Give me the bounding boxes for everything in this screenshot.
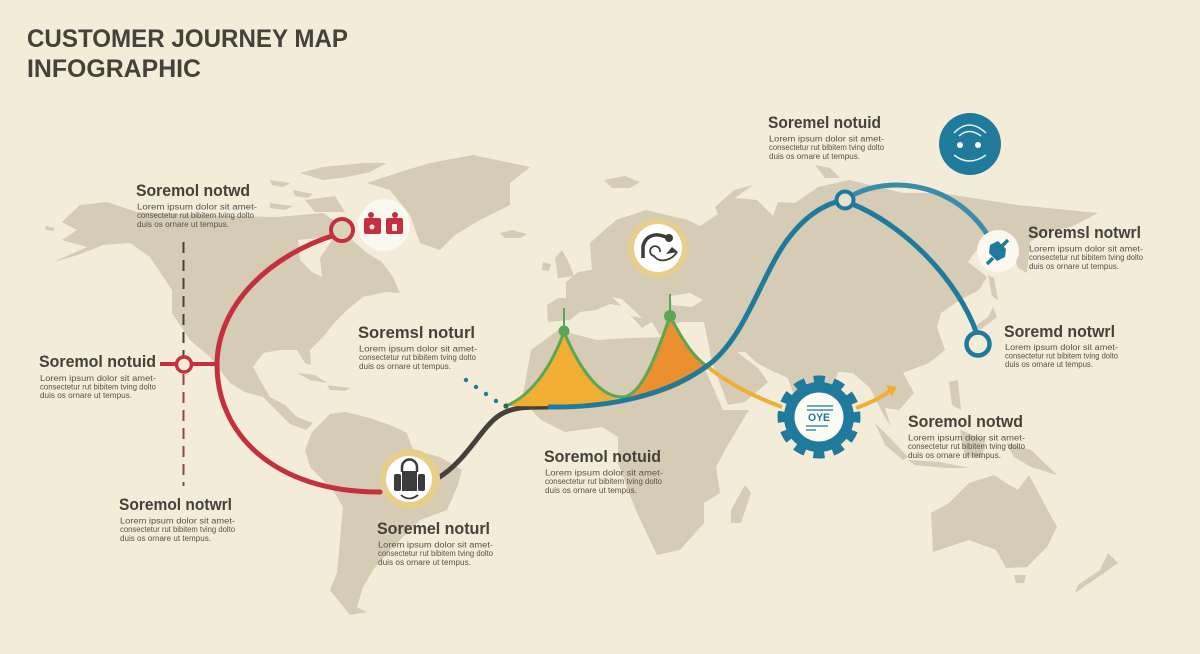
icon: gear (782, 380, 856, 454)
callout: top right: Lorem ipsum dolor sit amet- (769, 134, 884, 144)
top ring node (836, 192, 854, 208)
callout: top left (136, 182, 257, 229)
callout: japan (1004, 323, 1119, 369)
title: INFOGRAPHIC (27, 55, 201, 83)
callout: top right (768, 114, 885, 161)
callout: southeast asia: Soremol notwd (908, 413, 1023, 431)
callout: far east: Soremsl notwrl (1028, 224, 1141, 242)
callout: bottom left: consectetur rut bibitem tving dolto (120, 525, 236, 534)
callout: top left: consectetur rut bibitem tving dolto (137, 211, 255, 220)
callout: far east (1028, 224, 1144, 271)
callout: left: Lorem ipsum dolor sit amet- (40, 374, 156, 383)
callout: far east: consectetur rut bibitem tving dolto (1029, 253, 1144, 262)
end ring node (966, 332, 990, 356)
callout: africa (544, 448, 663, 495)
callout: southeast asia: consectetur rut bibitem tving dolto (908, 442, 1026, 451)
title: CUSTOMER JOURNEY MAP (27, 25, 348, 53)
blue descending arc (850, 203, 977, 334)
red connector with node (160, 357, 217, 372)
callout: south america: Soremel noturl (377, 520, 490, 538)
red ring node (331, 219, 353, 241)
red journey path (217, 235, 380, 492)
icon: gear: OYE (808, 412, 830, 424)
callout: top right: consectetur rut bibitem tving dolto (769, 143, 885, 152)
icon: swirl (628, 218, 688, 278)
icon: red cases (358, 199, 410, 251)
callout: atlantic: Lorem ipsum dolor sit amet- (359, 344, 477, 354)
callout: top right: duis os ornare ut tempus. (769, 152, 860, 161)
icon: plug (977, 230, 1019, 272)
callout: bottom left: Lorem ipsum dolor sit amet- (120, 516, 235, 526)
callout: bottom left (119, 496, 236, 543)
blue journey path (548, 200, 845, 407)
callout: southeast asia: duis os ornare ut tempus. (908, 451, 1001, 460)
green peaks line (506, 294, 708, 406)
callout: africa: Lorem ipsum dolor sit amet- (545, 468, 663, 478)
callout: top left: Soremol notwd (136, 182, 250, 200)
callout: africa: duis os ornare ut tempus. (545, 486, 637, 495)
callout: africa: Soremol notuid (544, 448, 661, 466)
world map (45, 155, 1118, 615)
orange area chart (506, 318, 708, 406)
callout: south america: duis os ornare ut tempus. (378, 558, 471, 567)
icon: bag (380, 449, 440, 509)
callout: left: duis os ornare ut tempus. (40, 391, 132, 400)
callout: japan: Lorem ipsum dolor sit amet- (1005, 343, 1118, 352)
icon: smiley (939, 113, 1001, 175)
light blue arc (845, 185, 987, 234)
callout: south america: Lorem ipsum dolor sit amet- (378, 540, 493, 550)
callout: left (39, 353, 157, 400)
callout: japan: consectetur rut bibitem tving dolto (1005, 352, 1119, 360)
callout: far east: Lorem ipsum dolor sit amet- (1029, 244, 1143, 254)
callout: atlantic: duis os ornare ut tempus. (359, 362, 451, 371)
dashed vertical guide (182, 242, 184, 486)
dark journey path (438, 407, 548, 478)
callout: left: consectetur rut bibitem tving dolto (40, 382, 157, 392)
yellow connector and arrow (708, 367, 896, 408)
callout: japan: Soremd notwrl (1004, 323, 1115, 341)
inland seas (298, 236, 703, 318)
callout: japan: duis os ornare ut tempus. (1005, 360, 1093, 369)
callout: atlantic: Soremsl noturl (358, 324, 475, 342)
callout: atlantic (358, 324, 477, 371)
callout: top right: Soremel notuid (768, 114, 881, 132)
callout: bottom left: Soremol notwrl (119, 496, 232, 514)
callout: top left: duis os ornare ut tempus. (137, 220, 229, 229)
callout: far east: duis os ornare ut tempus. (1029, 262, 1119, 271)
callout: bottom left: duis os ornare ut tempus. (120, 534, 211, 543)
dotted trail (464, 378, 509, 409)
callout: africa: consectetur rut bibitem tving dolto (545, 477, 663, 486)
callout: left: Soremol notuid (39, 353, 156, 371)
title (27, 25, 348, 83)
callout: south america: consectetur rut bibitem tving dolto (378, 549, 494, 558)
callout: southeast asia (908, 413, 1026, 460)
callout: south america (377, 520, 494, 567)
callout: top left: Lorem ipsum dolor sit amet- (137, 202, 257, 212)
callout: atlantic: consectetur rut bibitem tving dolto (359, 353, 477, 362)
callout: southeast asia: Lorem ipsum dolor sit amet- (908, 434, 1025, 442)
